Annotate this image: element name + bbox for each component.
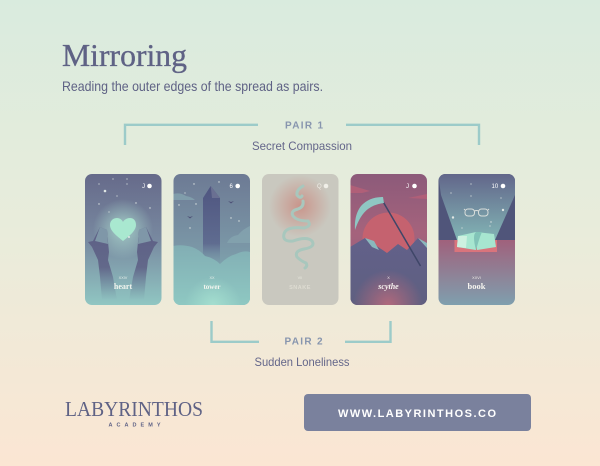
card 3: snake (faded): VII bbox=[298, 276, 302, 280]
card 4: scythe: J bbox=[406, 184, 409, 190]
icon: hands bbox=[88, 227, 158, 300]
pair 2 name: Sudden Loneliness bbox=[254, 355, 350, 369]
card 1: heart: XXIV bbox=[119, 276, 128, 280]
subtitle: Reading the outer edges of the spread as pairs. bbox=[62, 78, 323, 94]
card 5: book: book bbox=[468, 281, 486, 291]
logo: academy: ACADEMY bbox=[108, 422, 161, 428]
bracket: pair 1 bbox=[125, 125, 479, 145]
card 2: tower: 6 bbox=[230, 184, 234, 190]
card 3: snake (faded): Q bbox=[317, 184, 322, 190]
card 2: tower: tower bbox=[203, 283, 221, 291]
icon: heart bbox=[110, 218, 136, 241]
icon: moon bbox=[362, 212, 414, 253]
card 4: scythe: scythe bbox=[377, 282, 399, 291]
logo: Labyrinthos wordmark: LABYRINTHOS bbox=[65, 397, 203, 421]
icon: scythe bbox=[382, 199, 420, 266]
button bbox=[304, 394, 531, 431]
clouds bbox=[173, 193, 250, 243]
card 1: heart: heart bbox=[114, 282, 132, 291]
card 1: heart: J bbox=[142, 184, 145, 190]
icon: glasses bbox=[464, 209, 489, 216]
button text: WWW.LABYRINTHOS.CO bbox=[338, 408, 496, 420]
bracket: pair 2 bbox=[212, 321, 390, 342]
card 2: tower bbox=[174, 174, 250, 305]
card 4: scythe: X bbox=[387, 276, 390, 280]
label: pair 2: PAIR 2 bbox=[284, 336, 323, 348]
birds bbox=[187, 201, 234, 218]
card 1: heart bbox=[85, 174, 162, 305]
card 5: book bbox=[438, 174, 515, 305]
icon: tower bbox=[203, 186, 220, 258]
mountains bbox=[350, 238, 427, 305]
card 4: scythe bbox=[350, 174, 427, 305]
pair 1 name: Secret Compassion bbox=[252, 139, 352, 153]
icon: book bbox=[454, 240, 497, 252]
card 5: book: XXVI bbox=[472, 276, 481, 280]
label: pair 1: PAIR 1 bbox=[285, 120, 323, 132]
card 2: tower: XX bbox=[209, 276, 215, 280]
title: Mirroring bbox=[62, 37, 187, 73]
card 5: book: 10 bbox=[492, 184, 499, 190]
card 3: snake (faded) bbox=[262, 174, 338, 305]
light beam bbox=[438, 174, 515, 240]
icon: snake bbox=[284, 186, 313, 268]
card 3: snake (faded): SNAKE bbox=[289, 285, 311, 291]
